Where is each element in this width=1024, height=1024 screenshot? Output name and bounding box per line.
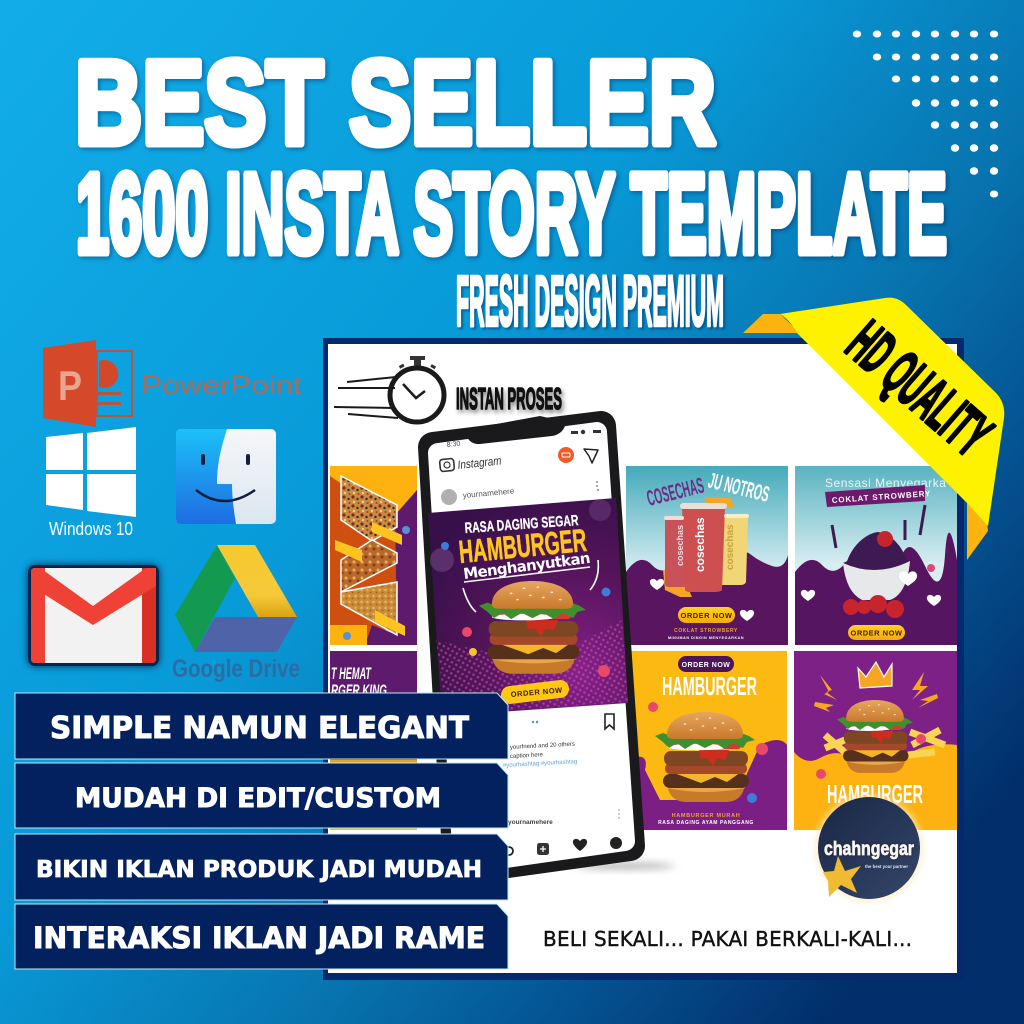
template tile: hamburger yellow: RASA DAGING AYAM PANGGANG: [658, 820, 754, 826]
stopwatch icon: [334, 356, 444, 422]
instagram header: [439, 447, 598, 472]
template tile: coklat strowbery: Sensasi Menyegarka: [825, 476, 947, 490]
template tile: cosechas drink: [626, 466, 788, 645]
icon: windows 10: Windows 10: [49, 519, 133, 539]
post actions and caption: yournamehere: [508, 819, 553, 826]
banner: mudah di edit/custom: [15, 763, 508, 828]
icon: google drive: Google Drive: [172, 655, 300, 683]
phone notch: [464, 416, 566, 444]
icon: powerpoint: P: [58, 362, 82, 409]
dot pattern: [853, 30, 998, 198]
card surface: [328, 344, 957, 973]
post actions and caption: caption here: [510, 752, 544, 760]
template tile: coklat strowbery: ORDER NOW: [850, 628, 903, 638]
banner: interaksi iklan jadi rame: INTERAKSI IKLAN JADI RAME: [33, 921, 485, 955]
icon: windows 10: [46, 427, 136, 539]
banner: interaksi iklan jadi rame: [15, 904, 508, 969]
phone drop shadow: [575, 863, 675, 869]
template tile: cosechas drink: JU NOTROS: [706, 468, 772, 507]
ribbon: hd quality: [743, 298, 1004, 560]
template tile: purple hemat: RGER KING: [331, 681, 387, 700]
panel: main card: [323, 338, 964, 980]
banner: mudah di edit/custom: MUDAH DI EDIT/CUSTOM: [75, 783, 441, 814]
post artwork: hamburger: Menghanyutkan: [462, 549, 591, 583]
icon: finder: [176, 429, 276, 524]
phone mockup: [428, 416, 630, 870]
template tile: cosechas drink: cosechas: [725, 524, 736, 570]
post artwork: hamburger: HAMBURGER: [457, 522, 588, 570]
template tile: hamburger yellow: HAMBURGER MURAH: [672, 813, 740, 819]
template tile: cosechas drink: cosechas: [675, 525, 685, 566]
banner: bikin iklan produk jadi mudah: [15, 834, 508, 900]
post artwork: hamburger: RASA DAGING SEGAR: [464, 512, 579, 537]
logo badge: chahngegar: [815, 794, 923, 902]
icon: powerpoint: [43, 340, 303, 427]
post author row: [441, 481, 599, 505]
post artwork: hamburger: ORDER NOW: [510, 685, 563, 699]
template tile: hamburger yellow: HAMBURGER: [662, 671, 757, 701]
phone body: [433, 426, 630, 870]
instagram header: Instagram: [457, 453, 502, 472]
status bar: 8:30: [446, 441, 461, 449]
template tile: hamburger yellow: ORDER NOW: [682, 662, 730, 669]
template tile: purple hemat: T HEMAT: [331, 664, 372, 683]
status bar: [446, 430, 601, 449]
template tile: cosechas drink: cosechas: [693, 517, 707, 572]
logo badge: chahngegar: the best your partner: [865, 864, 908, 869]
template tile: hamburger crown: HAMBURGER: [827, 779, 923, 809]
template tile: hamburger yellow: [626, 651, 787, 830]
post actions and caption: #yourhashtag #yourhashtag: [503, 759, 577, 769]
icon: gmail: [28, 565, 159, 666]
icon: google drive: [172, 545, 300, 683]
post actions and caption: yourfriend and 20 others: [510, 742, 575, 751]
panel: main card: INSTAN PROSES: [456, 381, 562, 416]
title: best seller: BEST SELLER: [75, 36, 716, 170]
template tile: cosechas drink: COKLAT STROWBERY: [674, 628, 738, 634]
template tile: cosechas drink: COSECHAS: [644, 473, 706, 511]
template tile: coklat strowbery: [795, 466, 957, 645]
icon: powerpoint: PowerPoint: [141, 370, 303, 400]
post author row: yournamehere: [462, 486, 515, 500]
template tile: pizza: [330, 466, 417, 645]
post actions and caption: [503, 714, 620, 826]
banner: simple namun elegant: SIMPLE NAMUN ELEGANT: [50, 711, 470, 746]
post artwork: hamburger: [428, 498, 628, 716]
template tile: purple hemat: [330, 651, 417, 830]
template tile: coklat strowbery: COKLAT STROWBERY: [832, 489, 931, 505]
tagline: BELI SEKALI... PAKAI BERKALI-KALI...: [543, 927, 912, 951]
phone screen: [438, 432, 625, 864]
template tile: hamburger crown: [794, 651, 957, 830]
card frame: [323, 338, 964, 980]
template tile: cosechas drink: MINUMAN DINGIN MENYEGARKAN: [668, 636, 744, 640]
bottom navigation icons: [505, 837, 622, 855]
template tile: cosechas drink: ORDER NOW: [680, 611, 733, 620]
logo badge: chahngegar: chahngegar: [824, 839, 914, 860]
banner: bikin iklan produk jadi mudah: BIKIN IKLAN PRODUK JADI MUDAH: [36, 857, 482, 883]
banner: simple namun elegant: [15, 693, 508, 759]
